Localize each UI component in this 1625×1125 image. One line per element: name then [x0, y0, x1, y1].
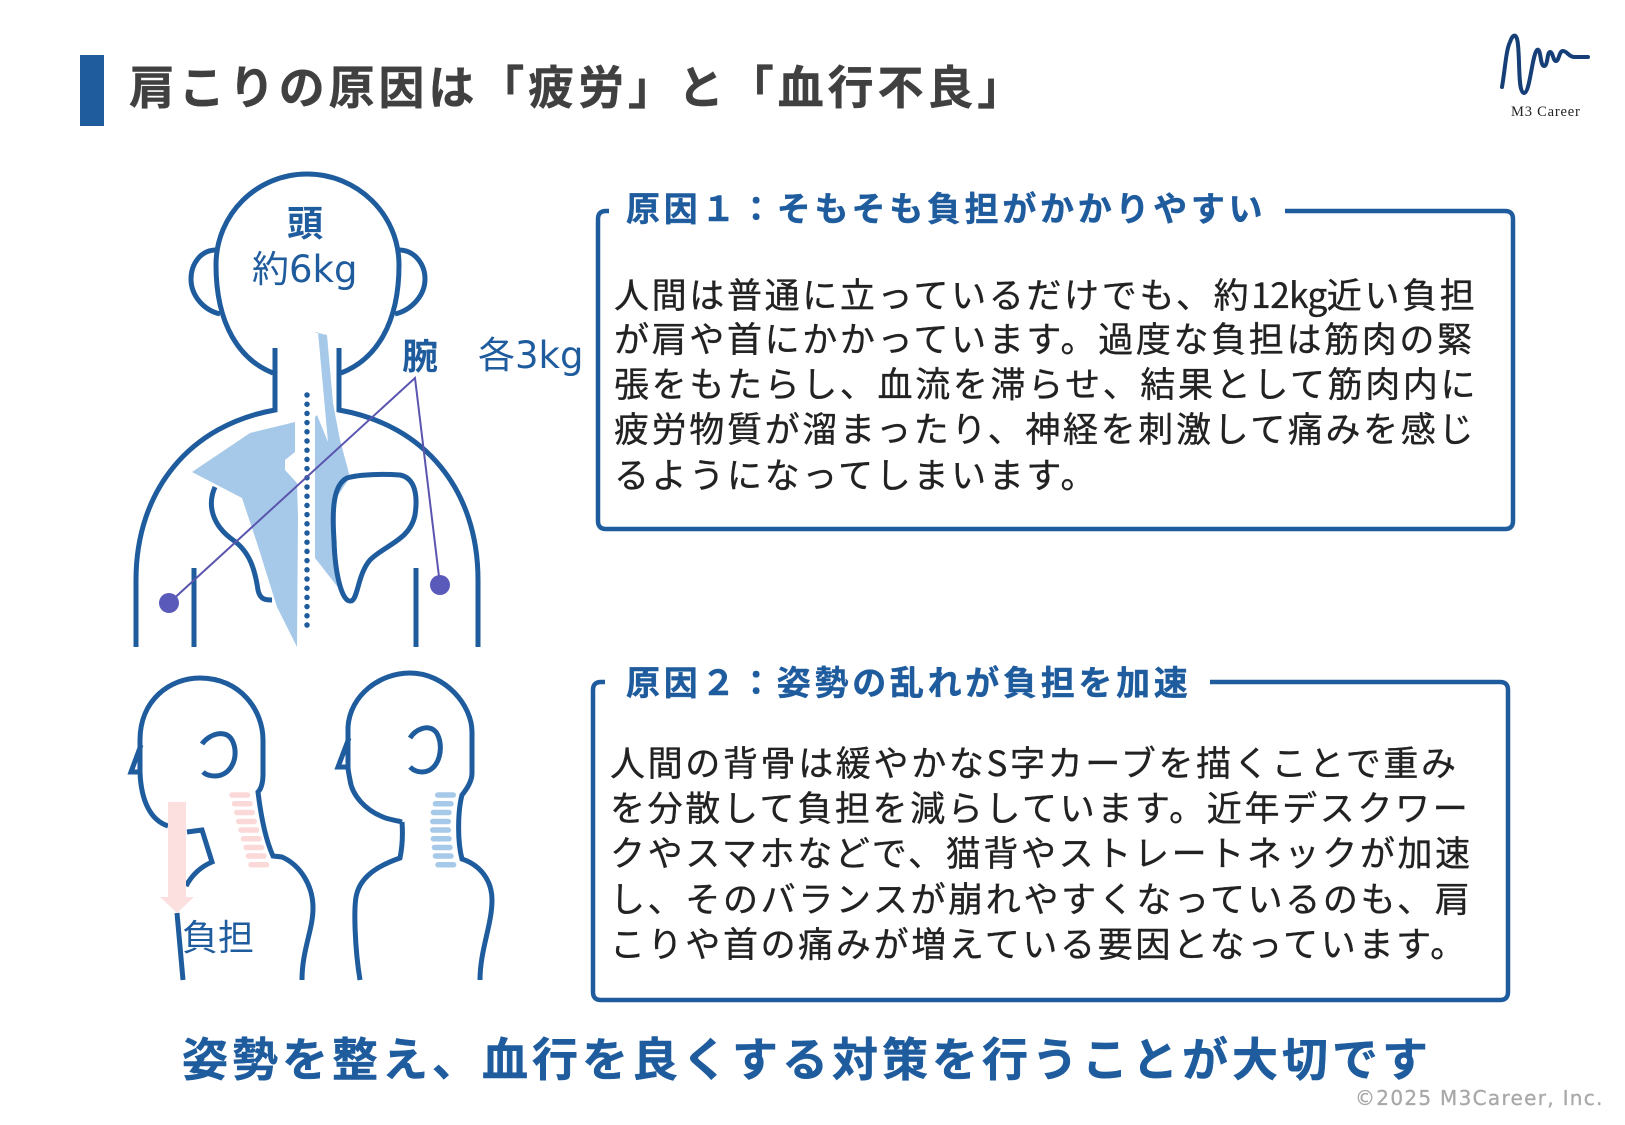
head and shoulder outline	[136, 174, 478, 647]
panel border	[593, 682, 1508, 1000]
text block: cause 1: が肩や首にかかっています。過度な負担は筋肉の緊	[614, 312, 1475, 363]
pink neck vertebrae	[229, 792, 269, 868]
text block: cause 1: 疲労物質が溜まったり、神経を刺激して痛みを感じ	[614, 402, 1476, 453]
outline: forward head	[131, 678, 313, 980]
illustration: correct posture	[338, 673, 492, 980]
label: arm weight: 各3kg	[478, 325, 583, 379]
logo: M3 Career	[1502, 36, 1588, 120]
title: 肩こりの原因は「疲労」と「血行不良」	[129, 52, 1027, 118]
label: arm weight	[402, 325, 583, 380]
outline: upright head	[338, 673, 492, 980]
label: head weight: 約6kg	[252, 239, 357, 293]
panel: cause 1	[598, 182, 1513, 529]
text block: cause 2: 人間の背骨は緩やかなS字カーブを描くことで重み	[610, 736, 1459, 787]
spine dotted line	[304, 395, 310, 632]
label: head weight	[252, 195, 357, 293]
text block: cause 2: クやスマホなどで、猫背やストレートネックが加速	[610, 826, 1473, 877]
conclusion: 姿勢を整え、血行を良くする対策を行うことが大切です	[182, 1024, 1432, 1090]
label: head weight: 頭	[287, 195, 323, 247]
panel: cause 2	[593, 656, 1508, 1000]
text block: cause 2: し、そのバランスが崩れやすくなっているのも、肩	[610, 872, 1472, 923]
title bar accent	[80, 55, 104, 126]
text block: cause 2: こりや首の痛みが増えている要因となっています。	[610, 917, 1468, 968]
text block: cause 2	[610, 736, 1473, 968]
heading: cause 1: 原因１：そもそも負担がかかりやすい	[626, 182, 1266, 231]
copyright: ©2025 M3Career, Inc.	[1355, 1086, 1604, 1110]
panel border	[598, 211, 1513, 529]
text block: cause 1: 人間は普通に立っているだけでも、約12kg近い負担	[614, 268, 1477, 319]
heading: cause 2: 原因２：姿勢の乱れが負担を加速	[626, 656, 1192, 705]
illustration: forward head posture	[131, 678, 313, 980]
text block: cause 1: 張をもたらし、血流を滞らせ、結果として筋肉内に	[614, 357, 1478, 408]
blue neck vertebrae	[430, 792, 456, 868]
logo: M3 Career: M3 Career	[1511, 104, 1581, 120]
label: load: 負担	[182, 909, 254, 961]
arrow: load downward	[160, 802, 194, 913]
text block: cause 2: を分散して負担を減らしています。近年デスクワー	[610, 781, 1470, 832]
illustration: back view with head and arm weights	[136, 174, 583, 647]
text block: cause 1	[614, 268, 1478, 499]
arm pointer lines and dots	[159, 378, 450, 613]
text block: cause 1: るようになってしまいます。	[614, 448, 1098, 499]
muscles: back view	[192, 332, 350, 647]
label: arm weight: 腕	[402, 328, 438, 380]
